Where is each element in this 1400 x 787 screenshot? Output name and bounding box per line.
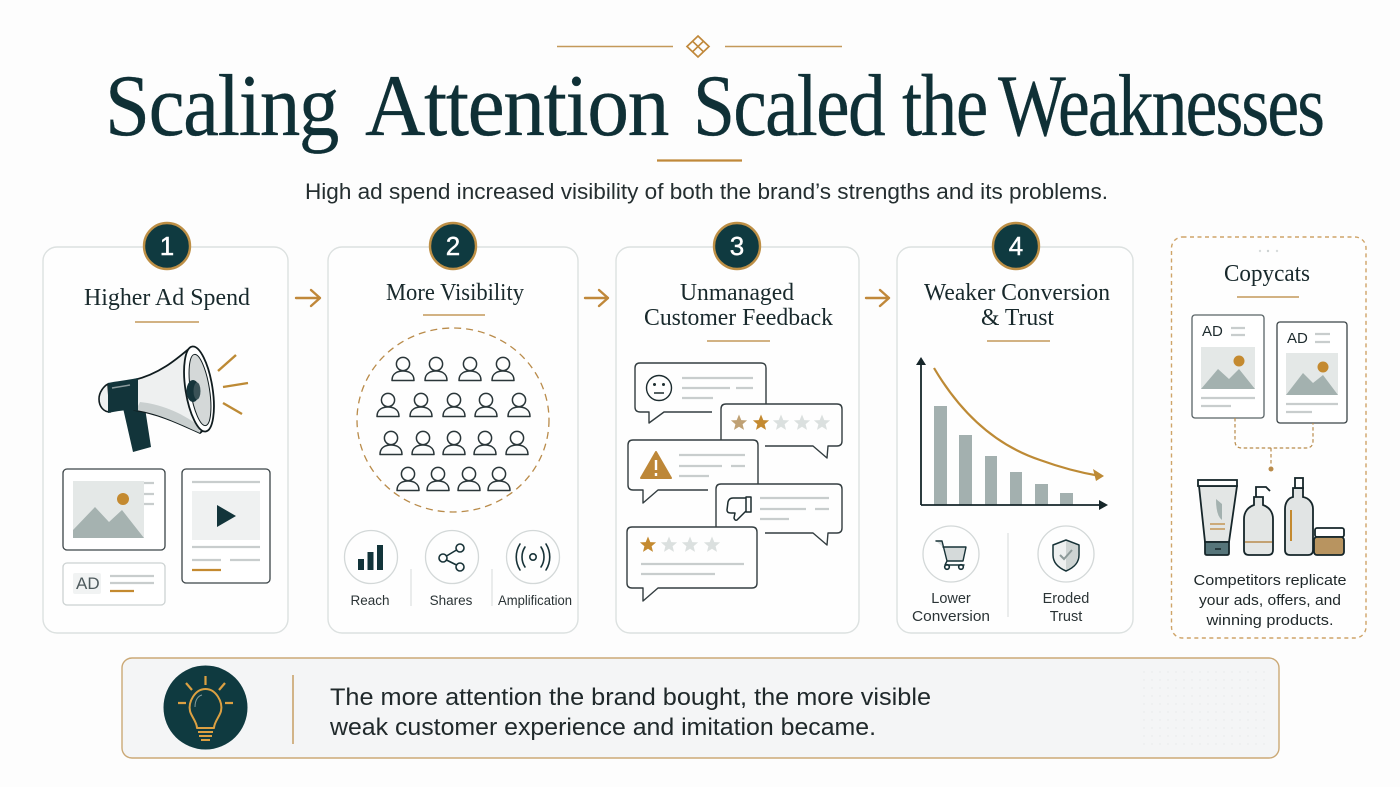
step badge 4 [993, 223, 1039, 269]
step badge 2: 2 [446, 231, 460, 261]
feedback bubble: warning [628, 440, 758, 503]
heading: unmanaged customer feedback: Unmanaged [680, 280, 794, 306]
step badge 4: 4 [1009, 231, 1023, 261]
heading: more visibility: More Visibility [386, 280, 524, 306]
label: lower conversion: Conversion [912, 609, 990, 625]
heading: copycats: Copycats [1224, 261, 1310, 287]
label: lower conversion: Lower [931, 591, 971, 607]
bar chart: declining conversion [916, 357, 1108, 510]
heading: weaker conversion and trust: Weaker Conversion [924, 280, 1110, 306]
label: eroded trust: Eroded [1043, 591, 1089, 607]
step badge 3 [714, 223, 760, 269]
text: takeaway message: weak customer experience and imitation became. [329, 714, 876, 741]
step badge 1: 1 [160, 231, 174, 261]
arrow 1 to 2 [296, 290, 320, 306]
label: reach: Reach [350, 593, 390, 608]
text: takeaway message [329, 684, 931, 741]
icon: cream jar [1314, 528, 1344, 555]
text ad card: AD [76, 574, 100, 593]
copied ad 1 [1192, 315, 1264, 418]
panel: step 3 unmanaged customer feedback [616, 223, 859, 633]
icon: amplification [506, 530, 560, 584]
title: Weaknesses [998, 58, 1323, 155]
step badge 2 [430, 223, 476, 269]
text: copycats description: Competitors replicate [1194, 572, 1346, 589]
panel: step 2 more visibility [328, 223, 578, 633]
dashed connector [1235, 418, 1313, 472]
title underline [657, 159, 742, 162]
label: eroded trust: Trust [1050, 609, 1082, 625]
step badge 1 [144, 223, 190, 269]
icon: megaphone [99, 344, 248, 452]
icon: reach [344, 530, 398, 584]
text: takeaway message: The more attention the brand bought, the more visible [330, 684, 931, 711]
audience circle [357, 328, 549, 512]
title: the [902, 58, 987, 155]
heading: unmanaged customer feedback [644, 280, 833, 331]
icon: tube product [1198, 480, 1237, 555]
icon: pump bottle [1244, 487, 1273, 555]
icon: eroded trust shield [1038, 526, 1094, 582]
feedback bubble: thumbs down [716, 484, 842, 545]
heading: weaker conversion and trust [924, 280, 1110, 331]
copied ad 2: AD [1287, 330, 1308, 347]
icon: shares [426, 530, 478, 584]
label: amplification: Amplification [498, 593, 572, 608]
subtitle: High ad spend increased visibility of both the brand’s strengths and its problems. [305, 179, 1108, 204]
feedback bubble: two stars [721, 404, 842, 458]
title [105, 58, 1323, 155]
text: copycats description [1194, 572, 1346, 629]
heading: weaker conversion and trust: & Trust [981, 305, 1054, 331]
arrow 2 to 3 [585, 290, 608, 306]
copied ad 1: AD [1202, 323, 1223, 340]
label: shares: Shares [430, 593, 473, 608]
step badge 3: 3 [730, 231, 744, 261]
icon: spray bottle [1285, 478, 1313, 555]
feedback bubble: neutral face [635, 363, 766, 423]
title: Scaled [693, 58, 885, 155]
image ad card [63, 469, 165, 550]
arrow 3 to 4 [866, 290, 889, 306]
feedback bubble: one star [627, 527, 757, 601]
label: eroded trust [1043, 591, 1089, 625]
panel: step 4 weaker conversion and trust [897, 223, 1133, 633]
label: lower conversion [912, 591, 990, 625]
text: copycats description: your ads, offers, and [1199, 592, 1341, 609]
title: Attention [365, 58, 668, 155]
ornament: top divider with diamond [557, 36, 842, 57]
icon: shopping cart [923, 526, 979, 582]
heading: higher ad spend: Higher Ad Spend [84, 285, 250, 311]
text ad card [63, 563, 165, 605]
callout: key takeaway [122, 658, 1279, 758]
heading: unmanaged customer feedback: Customer Feedback [644, 305, 833, 331]
text: copycats description: winning products. [1205, 612, 1334, 629]
panel: step 1 higher ad spend [43, 223, 288, 633]
title: Scaling [105, 58, 338, 155]
panel: copycats [1172, 237, 1366, 638]
icon: light bulb [164, 666, 248, 750]
video ad card [182, 469, 270, 583]
copied ad 2 [1277, 322, 1347, 423]
